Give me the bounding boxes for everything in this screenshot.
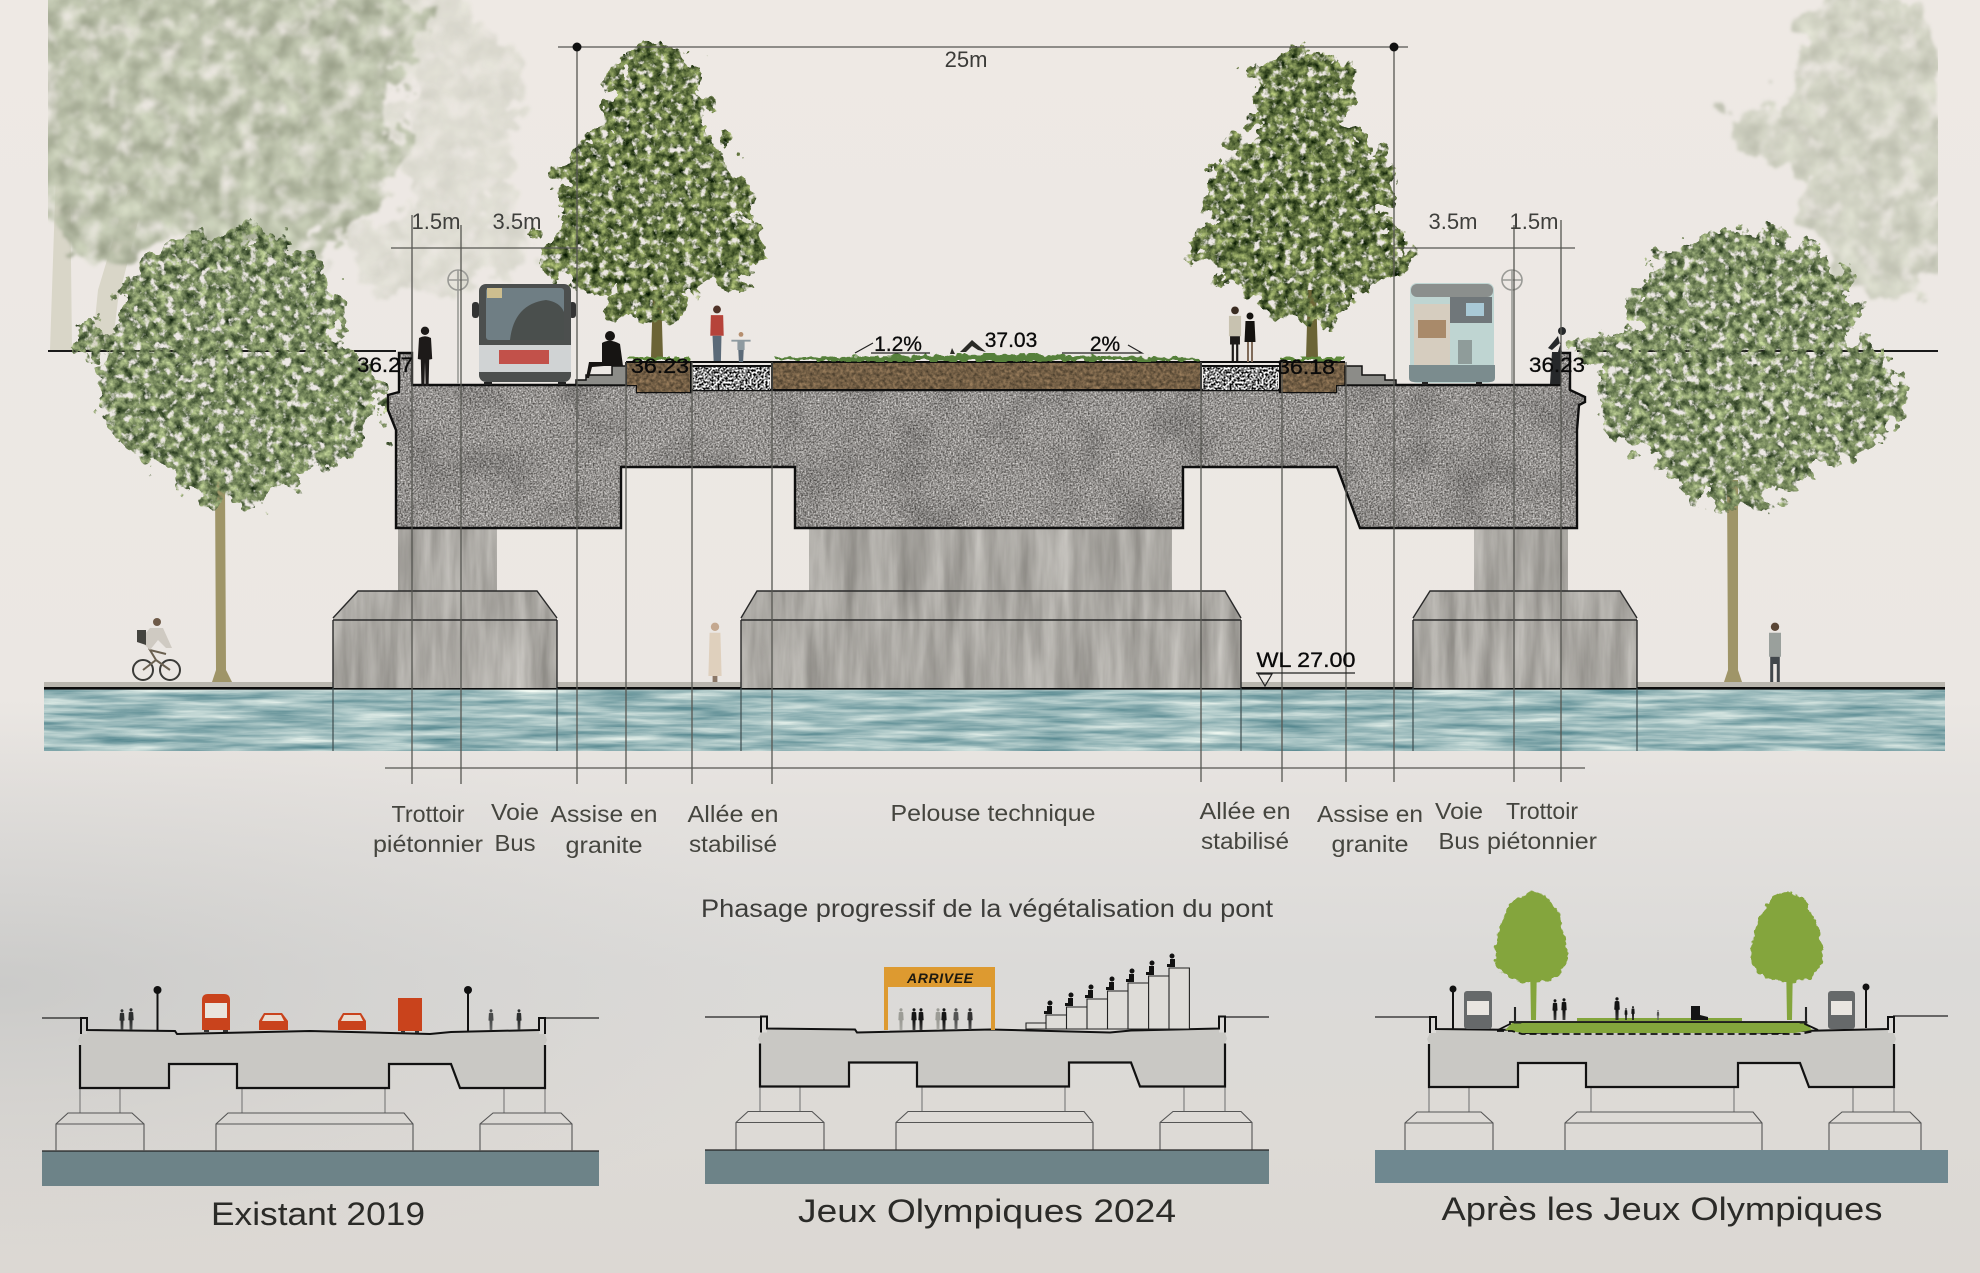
label assise right [1317, 801, 1423, 857]
lamp post left [448, 270, 468, 384]
icon: green tree right [1751, 892, 1823, 1020]
label assise left [550, 801, 658, 858]
elevation 36.23 right: 36.23 [1529, 354, 1585, 377]
figures on the deck [418, 306, 1566, 386]
pier lines through the water [333, 688, 1637, 751]
label voie bus left: Voie [491, 799, 539, 825]
slope 1.2%: 1.2% [874, 333, 922, 356]
caption: Jeux Olympiques 2024 [798, 1193, 1176, 1229]
water level: WL 27.00 [1256, 649, 1356, 672]
icon: pale tree top right [1730, 0, 1955, 295]
caption: Existant 2019 [211, 1196, 425, 1232]
stone steps left [576, 366, 626, 385]
cyclist [133, 618, 180, 680]
label assise right: Assise en [1317, 801, 1423, 827]
pale background trees [10, 0, 1955, 350]
pier left [333, 528, 557, 688]
dimension 25m: 25m [945, 47, 987, 72]
elevation 36.23 left: 36.23 [631, 355, 689, 378]
gravel right [1203, 367, 1278, 390]
bridge section [736, 1016, 1252, 1150]
bridge section [1405, 1017, 1921, 1150]
label pelouse: Pelouse technique [890, 800, 1096, 826]
left foreground tree [78, 230, 380, 682]
caption: Après les Jeux Olympiques [1442, 1191, 1882, 1227]
soil left [626, 362, 691, 392]
figure: child [731, 332, 751, 362]
water [44, 689, 1945, 751]
dimension dot left [572, 42, 582, 52]
icon: bus right [1828, 991, 1855, 1029]
water band [705, 1150, 1269, 1184]
slope leaders [855, 343, 1355, 686]
bridge tree left [540, 45, 764, 358]
icon: red car right [338, 1013, 366, 1030]
label trottoir piétonnier left: Trottoir [392, 801, 465, 827]
green lawn bed [1505, 1022, 1812, 1033]
label trottoir piétonnier left: piétonnier [373, 831, 483, 857]
planter grass left [628, 357, 690, 361]
lamp right [1862, 984, 1870, 1028]
lamp right [464, 986, 472, 1031]
bridge tree right [1194, 45, 1410, 358]
icon: red truck [398, 998, 422, 1033]
bleachers [1026, 968, 1189, 1029]
stone steps right [1345, 366, 1396, 385]
label assise left: granite [566, 832, 642, 858]
panel: Jeux Olympiques 2024 [705, 954, 1269, 1229]
pedestrian in white [708, 623, 722, 682]
people on the walkway [1552, 997, 1708, 1020]
lawn grass [773, 354, 1199, 361]
figure: seated person [586, 331, 623, 378]
dimension lines [385, 47, 1585, 784]
concrete bridge deck [388, 353, 1585, 528]
pedestrian right [1769, 623, 1781, 682]
label allée left [688, 801, 778, 857]
people left [119, 1008, 134, 1030]
elevation 37.03: 37.03 [985, 329, 1037, 352]
elevation 36.27: 36.27 [357, 354, 413, 377]
label 1.5m left: 1.5m [412, 209, 460, 234]
slope 2%: 2% [1090, 333, 1120, 356]
figure: pedestrian left [418, 327, 432, 386]
seated spectators [1044, 954, 1175, 1014]
pier centre [741, 528, 1241, 688]
water band [1375, 1150, 1948, 1183]
figure: woman in red [710, 306, 724, 361]
lawn soil bed [773, 362, 1200, 390]
gravel left [693, 367, 770, 390]
right foreground tree [1574, 230, 1906, 682]
ground strip [44, 682, 1945, 688]
people right [488, 1009, 522, 1030]
zone labels [373, 798, 1597, 858]
label voie bus right: Bus [1438, 828, 1480, 854]
figure: couple [1229, 307, 1241, 361]
lamp post right [1502, 270, 1522, 384]
label allée right [1200, 798, 1290, 854]
label trottoir piétonnier left [373, 801, 483, 857]
figure: runner [1548, 327, 1566, 384]
icon: red bus [202, 994, 230, 1032]
label allée right: stabilisé [1201, 828, 1289, 854]
figure: woman in couple [1244, 312, 1256, 362]
label assise left: Assise en [550, 801, 658, 827]
dimension dot right [1390, 42, 1398, 52]
label 3.5m right: 3.5m [1429, 209, 1477, 234]
arrival arch [884, 967, 995, 1030]
lamp left [154, 986, 162, 1030]
elevation 36.18: 36.18 [1277, 356, 1335, 379]
label voie bus left [491, 799, 539, 856]
label voie bus right: Voie [1435, 798, 1483, 824]
lamp left [1450, 986, 1456, 1029]
label assise right: granite [1332, 831, 1408, 857]
figure: person on the lawn [950, 340, 986, 354]
icon: bus rear [1409, 283, 1495, 385]
arrival sign text: ARRIVEE [906, 970, 974, 986]
label voie bus right [1435, 798, 1483, 854]
panel: Existant 2019 [42, 986, 599, 1232]
label allée right: Allée en [1200, 798, 1290, 824]
label 1.5m right: 1.5m [1510, 209, 1558, 234]
label trottoir piétonnier right [1487, 798, 1597, 854]
dimension labels [412, 209, 1558, 234]
label voie bus left: Bus [494, 830, 536, 856]
soil right [1280, 362, 1345, 392]
icon: pale tree top left [10, 0, 530, 350]
heading: phasing: Phasage progressif de la végétalisation du pont [701, 895, 1273, 923]
elevation and slope labels [357, 329, 1585, 672]
planter grass right [1282, 357, 1344, 361]
icon: green tree left [1495, 892, 1567, 1020]
panel: Après les Jeux Olympiques [1375, 892, 1948, 1227]
label allée left: Allée en [688, 801, 778, 827]
label 3.5m left: 3.5m [493, 209, 541, 234]
icon: red car left [259, 1013, 288, 1030]
label trottoir piétonnier right: Trottoir [1506, 798, 1578, 824]
pier right [1413, 528, 1637, 688]
seated figures [1514, 1007, 1807, 1022]
horizon line behind the trees [48, 350, 1938, 352]
crowd [898, 1008, 973, 1030]
water level line [44, 687, 1945, 690]
surface outlines [626, 362, 1345, 392]
water band [42, 1151, 599, 1186]
icon: bus front [472, 284, 576, 385]
bridge section [56, 1018, 572, 1151]
icon: bus left [1464, 991, 1492, 1029]
label allée left: stabilisé [689, 831, 777, 857]
label trottoir piétonnier right: piétonnier [1487, 828, 1597, 854]
